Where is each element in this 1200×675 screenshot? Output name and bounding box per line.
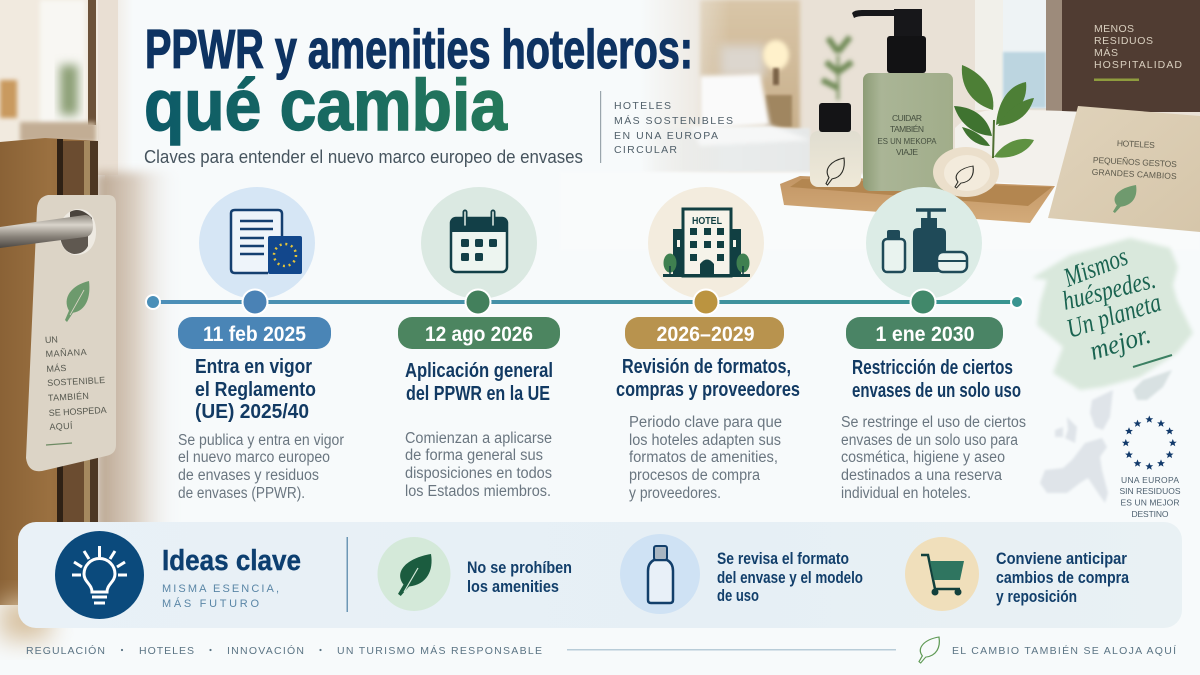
icon: footer leaf <box>919 637 939 663</box>
step 1: Se publica y entra en vigor <box>178 432 344 449</box>
pump bottle <box>852 9 953 191</box>
icon: amenity bottles <box>866 187 982 299</box>
step 1: de envases (PPWR). <box>178 485 305 502</box>
panel text: menos residuos <box>1094 23 1182 81</box>
tent card: PEQUEÑOS GESTOS <box>1093 155 1177 169</box>
door handle <box>0 215 93 248</box>
step 3: formatos de amenities, <box>629 449 778 466</box>
step 3: Periodo clave para que <box>629 414 782 431</box>
subtitle: Claves para entender el nuevo marco europeo de envases <box>144 146 583 167</box>
tent card <box>1048 106 1200 232</box>
idea: format: Se revisa el formato <box>717 549 849 568</box>
step 1: el Reglamento <box>195 379 316 401</box>
bottle label: ES UN MEKOPA <box>878 136 937 146</box>
step 3 <box>616 317 800 502</box>
hanger text: AQUÍ <box>49 421 73 432</box>
idea: amenities: No se prohíben <box>467 558 572 577</box>
hanger text: UN <box>45 334 58 345</box>
step 2: Aplicación general <box>405 360 553 382</box>
step 4: Restricción de ciertos <box>852 357 1013 379</box>
idea: purchasing: cambios de compra <box>996 568 1129 587</box>
icon: hotel building: HOTEL <box>692 216 722 227</box>
panel text: menos residuos: RESIDUOS <box>1094 35 1153 47</box>
step 3: compras y proveedores <box>616 379 800 401</box>
hanger leaf <box>65 281 89 322</box>
step 2: los Estados miembros. <box>405 483 551 500</box>
footer left tags: UN TURISMO MÁS RESPONSABLE <box>337 644 542 657</box>
panel: ideas clave <box>18 522 1182 628</box>
bottle label <box>878 113 937 157</box>
bottle label: VIAJE <box>896 147 918 157</box>
footer left tags: INNOVACIÓN <box>227 644 304 657</box>
step 4: individual en hoteles. <box>841 485 971 502</box>
bottle label: TAMBIÉN <box>890 124 924 134</box>
timeline dots <box>146 290 1023 314</box>
tent card: HOTELES <box>1117 138 1155 150</box>
step 4: destinados a una reserva <box>841 467 1002 484</box>
callout: handwritten slogan: Mismos <box>1059 241 1132 293</box>
tagline: hoteles más sostenibles: EN UNA EUROPA <box>614 130 718 142</box>
step 2: disposiciones en todos <box>405 465 552 482</box>
EU caption: UNA EUROPA <box>1121 475 1179 485</box>
title: qué cambia <box>144 66 508 146</box>
heading: ideas clave: MÁS FUTURO <box>162 597 259 610</box>
step 4: cosmética, higiene y aseo <box>841 449 1005 466</box>
icon: regulation document <box>199 187 315 299</box>
idea: format <box>620 534 863 614</box>
door hanger <box>0 195 116 471</box>
callout: handwritten slogan <box>1032 238 1193 390</box>
EU caption <box>1120 475 1181 519</box>
footer left tags <box>26 644 542 657</box>
panel text: menos residuos: MÁS <box>1094 46 1118 59</box>
tagline: hoteles más sostenibles: MÁS SOSTENIBLES <box>614 114 733 127</box>
idea: purchasing: Conviene anticipar <box>996 549 1127 568</box>
callout: handwritten slogan: Un planeta <box>1063 287 1165 344</box>
wooden tray <box>780 176 1055 223</box>
idea: purchasing: y reposición <box>996 587 1077 606</box>
footer left tags: REGULACIÓN <box>26 644 105 657</box>
step 4 <box>841 317 1026 502</box>
step 4: Se restringe el uso de ciertos <box>841 414 1026 431</box>
heading: ideas clave: MISMA ESENCIA, <box>162 583 279 595</box>
hanger text: MÁS <box>46 363 67 374</box>
step 2: Comienzan a aplicarse <box>405 430 552 447</box>
callout: handwritten slogan: huéspedes. <box>1059 264 1159 316</box>
panel text: menos residuos: HOSPITALIDAD <box>1094 59 1182 71</box>
EU caption: ES UN MEJOR <box>1120 498 1180 508</box>
icon: lightbulb <box>55 531 144 619</box>
hanger text <box>45 332 108 432</box>
hanger text: TAMBIÉN <box>48 391 89 403</box>
idea: format: de uso <box>717 586 759 605</box>
step 3: Revisión de formatos, <box>622 356 791 378</box>
small bottle <box>810 103 861 187</box>
bottle label: CUIDAR <box>892 113 922 123</box>
hanger text: SOSTENIBLE <box>47 375 105 388</box>
tagline: hoteles más sostenibles: HOTELES <box>614 100 671 112</box>
title <box>144 18 693 146</box>
idea: amenities <box>378 537 572 611</box>
photo: hotel room background <box>560 0 1200 250</box>
idea: format: del envase y el modelo <box>717 568 863 587</box>
step 2: del PPWR en la UE <box>406 383 550 405</box>
photo: hotel door with handle and hanger <box>0 0 181 640</box>
heading: ideas clave <box>162 545 301 610</box>
hanger text: MAÑANA <box>45 347 87 359</box>
step 3: los hoteles adapten sus <box>629 432 781 449</box>
towel <box>955 110 1082 186</box>
icon: hotel building <box>648 187 764 299</box>
step 3: procesos de compra <box>629 467 760 484</box>
timeline line <box>153 300 1017 304</box>
step 1: (UE) 2025/40 <box>195 401 309 423</box>
tagline: hoteles más sostenibles: CIRCULAR <box>614 144 677 156</box>
step 4: envases de un solo uso <box>852 380 1021 402</box>
step 4: envases de un solo uso para <box>841 432 1018 449</box>
step 2 <box>398 317 560 500</box>
green plant <box>954 65 1034 158</box>
step 1: el nuevo marco europeo <box>178 449 330 466</box>
step 3: 2026–2029 <box>656 323 754 346</box>
tagline: hoteles más sostenibles <box>600 91 733 163</box>
step 1: de envases y residuos <box>178 467 319 484</box>
step 1 <box>178 317 344 502</box>
icon: calendar <box>421 187 537 299</box>
panel text: menos residuos: MENOS <box>1094 23 1134 35</box>
soap <box>933 147 999 197</box>
EU caption: DESTINO <box>1132 509 1169 519</box>
timeline <box>146 187 1026 502</box>
idea: purchasing <box>905 537 1129 611</box>
footer left tags: HOTELES <box>139 645 194 657</box>
callout: handwritten slogan: mejor. <box>1086 319 1154 366</box>
EU caption: SIN RESIDUOS <box>1120 486 1181 496</box>
hanger text: SE HOSPEDA <box>48 405 107 418</box>
step 2: 12 ago 2026 <box>425 323 533 346</box>
map of Europe <box>1040 370 1172 503</box>
step 1: Entra en vigor <box>195 356 312 378</box>
background plant <box>822 37 852 100</box>
tent card: GRANDES CAMBIOS <box>1092 167 1177 181</box>
idea: amenities: los amenities <box>467 577 559 596</box>
step 3: y proveedores. <box>629 485 721 502</box>
step 4: 1 ene 2030 <box>876 323 974 346</box>
heading: ideas clave: Ideas clave <box>162 545 301 577</box>
step 2: de forma general sus <box>405 447 543 464</box>
icon: EU stars <box>1122 416 1177 470</box>
title: PPWR y amenities hoteleros: <box>145 18 693 80</box>
footer right text: EL CAMBIO TAMBIÉN SE ALOJA AQUÍ <box>952 644 1176 657</box>
step 1: 11 feb 2025 <box>203 323 306 346</box>
